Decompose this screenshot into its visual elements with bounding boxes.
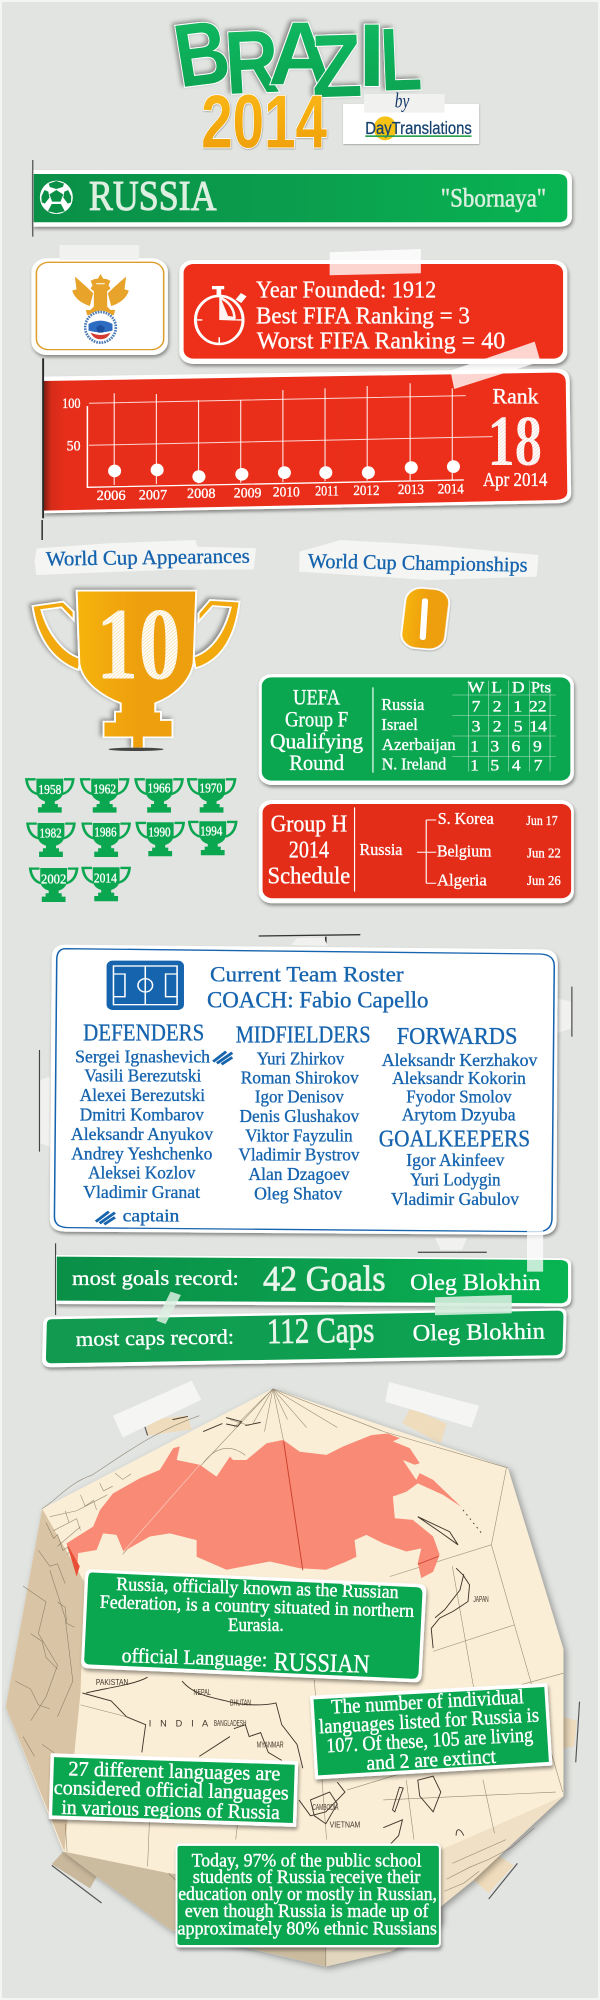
callout: official language: official Language: — [121, 1645, 268, 1671]
Asia coast lines — [82, 1416, 483, 1844]
text: worst ranking: Worst FIFA Ranking = 40 — [257, 327, 505, 354]
bar: most caps record: most caps record: — [76, 1325, 234, 1351]
callout: education in Russian: education only or mostly in Russian, — [178, 1884, 437, 1905]
legend: captain — [96, 1207, 180, 1226]
table: group standings: 7 — [472, 698, 480, 715]
text: date: Apr 2014 — [483, 468, 548, 491]
map labels: CAMBODIA — [312, 1803, 339, 1812]
meridian lines — [15, 1389, 563, 1966]
section: header and ranking — [31, 2, 572, 518]
line chart: rank history: 2008 — [187, 486, 216, 502]
callout: official languages — [50, 1754, 297, 1826]
list: defenders — [71, 1019, 213, 1203]
title: Brazil — [167, 2, 424, 117]
map labels: MYANMAR — [257, 1741, 284, 1750]
icon: orange zero — [400, 586, 451, 651]
list: goalkeepers: Yuri Lodygin — [410, 1171, 501, 1190]
callout: number of languages — [311, 1684, 551, 1778]
text: coach: COACH: Fabio Capello — [207, 988, 429, 1013]
text: Group H 2014 schedule — [268, 810, 350, 889]
text: best ranking: Best FIFA Ranking = 3 — [256, 302, 470, 329]
table: group standings: 4 — [512, 757, 521, 774]
trophy 2014 — [83, 867, 130, 901]
trophy 1962 — [81, 779, 128, 813]
small trophies: tournament years — [26, 779, 236, 902]
icon: captain mark — [213, 1052, 232, 1064]
trophy 2002 — [30, 868, 77, 902]
text: year founded: Year Founded: 1912 — [256, 276, 436, 303]
table: group standings: 6 — [512, 738, 520, 755]
list: goalkeepers: Vladimir Gabulov — [391, 1190, 519, 1210]
text: UEFA Group F qualifying round — [270, 686, 363, 776]
title: 2014: 2014 — [201, 81, 327, 164]
table: group standings: 3 — [490, 738, 499, 755]
line chart: rank history: 50 — [67, 439, 81, 454]
trophy 1966: 1966 — [148, 782, 171, 796]
bracket: fixtures: Jun 26 — [527, 874, 561, 889]
trophy 1986 — [83, 823, 130, 857]
callout: official languages: in various regions of Russia — [61, 1797, 280, 1824]
callout: official languages: considered official languages — [54, 1777, 289, 1805]
map labels: PAKISTAN — [96, 1678, 128, 1687]
table: group standings: 5 — [490, 757, 499, 774]
trophy 1990: 1990 — [148, 825, 171, 840]
callout: official language: Eurasia. — [228, 1615, 284, 1636]
callout: official language: Russia, officially known as the Russian — [116, 1574, 400, 1603]
bar: most goals record: most goals record: — [72, 1266, 239, 1290]
panel: Group H schedule — [259, 800, 574, 903]
line chart: rank history — [62, 383, 493, 504]
text: Group H 2014 schedule: 2014 — [289, 836, 329, 863]
bracket: fixtures: Jun 17 — [526, 814, 558, 829]
icon: football — [40, 181, 73, 214]
list: forwards: Arytom Dzyuba — [402, 1106, 516, 1125]
heading: World Cup appearances: World Cup Appearances — [46, 544, 250, 570]
heading: World Cup championships: World Cup Championships — [308, 549, 528, 576]
list: forwards: Aleksandr Kokorin — [392, 1069, 526, 1089]
line chart: rank history: 2010 — [273, 485, 300, 500]
bar: most caps record: 112 Caps — [267, 1310, 375, 1352]
trophy 2002: 2002 — [41, 872, 66, 887]
tape: top right — [385, 1382, 479, 1428]
list: midfielders: Vladimir Bystrov — [238, 1146, 360, 1165]
panel: UEFA qualifying — [259, 674, 574, 785]
list: forwards — [382, 1023, 538, 1125]
list: forwards: Aleksandr Kerzhakov — [382, 1051, 538, 1071]
callout: official languages: 27 different languages are — [68, 1758, 281, 1785]
table: group standings: 7 — [534, 757, 543, 774]
map labels: BHUTAN — [230, 1699, 251, 1708]
map labels — [96, 1595, 489, 1830]
table: group standings: Pts — [531, 679, 551, 696]
logo: Day Translations — [343, 89, 479, 144]
table: group standings: 1 — [470, 738, 479, 755]
section: team roster and records — [39, 935, 572, 1367]
map labels: NEPAL — [194, 1688, 211, 1697]
table: group standings: 1 — [470, 757, 479, 774]
line chart: rank history: 2012 — [353, 483, 380, 499]
icon: paper globe map — [6, 1389, 580, 1966]
list: defenders: DEFENDERS — [83, 1019, 204, 1046]
trophy 1982: 1982 — [39, 826, 62, 841]
trophy 1994: 1994 — [200, 824, 222, 839]
card: Russian crest — [31, 245, 168, 355]
trophy 1958: 1958 — [38, 783, 61, 798]
map region: Russia — [67, 1433, 461, 1578]
list: midfielders: Igor Denisov — [255, 1088, 344, 1107]
text: UEFA Group F qualifying round: Qualifying — [270, 730, 363, 754]
table: group standings: 2 — [493, 698, 502, 715]
callout: education in Russian: even though Russia is made up of — [185, 1901, 429, 1922]
table: group standings: Israel — [381, 715, 418, 734]
callout: education in Russian: Today, 97% of the public school — [192, 1850, 422, 1872]
table: group standings: 2 — [493, 717, 502, 735]
list: midfielders: Oleg Shatov — [254, 1184, 343, 1204]
bracket: fixtures — [360, 809, 561, 890]
text: current rank: Rank — [493, 384, 539, 409]
list: goalkeepers: GOALKEEPERS — [379, 1125, 530, 1152]
callout: number of languages: 107. Of these, 105 are living — [326, 1724, 534, 1758]
list: goalkeepers: Igor Akinfeev — [406, 1151, 505, 1171]
text: UEFA Group F qualifying round: Group F — [285, 708, 348, 732]
text: roster heading: Current Team Roster — [210, 962, 404, 987]
table: group standings: L — [491, 679, 502, 696]
list: midfielders: Roman Shirokov — [241, 1068, 359, 1088]
line chart: rank history: 2013 — [398, 482, 424, 498]
dark left facet — [6, 1509, 84, 1851]
trophy 1986: 1986 — [94, 825, 117, 840]
callout: official language — [81, 1569, 426, 1682]
text: UEFA Group F qualifying round: Round — [289, 751, 344, 776]
trophy 1970: 1970 — [199, 782, 222, 796]
icon: pitch — [107, 961, 184, 1010]
icon: eagle — [72, 274, 129, 315]
line chart: rank history: 2009 — [234, 485, 261, 501]
heading: Russia: RUSSIA — [89, 172, 217, 219]
list: midfielders: Denis Glushakov — [240, 1107, 359, 1127]
trophy 1962: 1962 — [93, 782, 116, 797]
list: defenders: Aleksandr Anyukov — [71, 1125, 213, 1145]
list: midfielders: Yuri Zhirkov — [257, 1049, 344, 1069]
bracket: fixtures: S. Korea — [438, 809, 494, 829]
bar: most goals record — [56, 1210, 571, 1307]
line chart: rank history: 2014 — [438, 481, 464, 497]
line chart: rank history: 2011 — [315, 484, 339, 499]
shaded lower facet — [63, 1851, 326, 1966]
bracket: fixtures: Belgium — [437, 842, 492, 861]
bar: most goals record: Oleg Blokhin — [410, 1270, 541, 1296]
list: midfielders — [236, 1021, 371, 1204]
table: group standings: 14 — [529, 717, 547, 735]
title: Brazil: B — [167, 2, 236, 107]
map labels: BANGLADESH — [214, 1719, 246, 1728]
map labels: I N D I A — [149, 1719, 209, 1729]
trophy 1958 — [26, 779, 73, 813]
section: World Cup record and group tables — [26, 520, 574, 903]
title: Brazil: L — [378, 10, 424, 110]
list: defenders: Vladimir Granat — [83, 1183, 201, 1203]
trophy 1966 — [136, 779, 182, 813]
number: 18: 18 — [488, 401, 542, 481]
bar: most goals record: 42 Goals — [263, 1259, 386, 1299]
table: group standings: 3 — [472, 717, 480, 735]
icon: large trophy with 10 — [33, 587, 240, 751]
trophy 1982 — [28, 823, 74, 857]
callout: number of languages: languages listed for Russia is — [318, 1704, 540, 1738]
banner: Russia — [32, 160, 572, 237]
list: defenders: Aleksei Kozlov — [88, 1164, 196, 1183]
line chart: rank history: 100 — [62, 396, 81, 412]
icon: large trophy with 10: 10 — [96, 587, 181, 702]
list: midfielders: Alan Dzagoev — [248, 1165, 350, 1185]
table: group standings: 9 — [533, 738, 542, 755]
list: defenders: Sergei Ignashevich — [75, 1047, 210, 1067]
table: group standings: 5 — [514, 717, 523, 735]
trophy 1994 — [189, 821, 236, 855]
icon: ball — [84, 311, 117, 344]
panel: roster — [50, 945, 558, 1235]
callout: education in Russian: approximately 80% ethnic Russians — [177, 1918, 437, 1940]
list: forwards: FORWARDS — [397, 1023, 517, 1050]
text: UEFA Group F qualifying round: UEFA — [293, 686, 340, 710]
bracket: fixtures: Jun 22 — [527, 846, 561, 861]
list: defenders: Vasili Berezutski — [84, 1067, 202, 1086]
line chart: rank history: 2007 — [139, 487, 167, 503]
table: group standings — [381, 679, 556, 774]
text: Group H 2014 schedule: Group H — [271, 810, 347, 837]
callout: number of languages: and 2 are extinct — [366, 1746, 497, 1775]
section: map and language facts — [6, 1381, 580, 1966]
logo: Day Translations: DayTranslations — [365, 118, 472, 138]
table: group standings: D — [512, 679, 525, 696]
bracket: fixtures: Algeria — [437, 871, 487, 890]
list: defenders: Alexei Berezutski — [80, 1086, 206, 1106]
list: forwards: Fyodor Smolov — [406, 1087, 512, 1107]
icon: stopwatch — [195, 286, 247, 344]
panel: founding and FIFA ranking — [179, 249, 567, 364]
callout: official language: Federation, is a country situated in northern — [100, 1592, 415, 1622]
callout: number of languages: The number of individual — [331, 1686, 525, 1719]
nickname: "Sbornaya" — [441, 184, 546, 213]
legend: captain: captain — [123, 1207, 180, 1226]
title: Brazil: Z — [309, 16, 364, 117]
callout: official language: RUSSIAN — [274, 1647, 370, 1679]
trophy 1990 — [137, 822, 184, 856]
text: Group H 2014 schedule: Schedule — [268, 862, 350, 889]
bar: most caps record — [42, 1308, 567, 1367]
list: midfielders: MIDFIELDERS — [236, 1021, 371, 1048]
trophy 2014: 2014 — [94, 871, 117, 886]
callout: education in Russian — [176, 1844, 441, 1947]
bracket: fixtures: Russia — [360, 840, 402, 859]
line chart: rank history: 2006 — [97, 488, 126, 504]
title: Brazil: I — [358, 6, 385, 105]
table: group standings: W — [468, 679, 485, 696]
table: group standings: 1 — [513, 698, 522, 715]
map labels: JAPAN — [473, 1595, 489, 1604]
list: defenders: Dmitri Kombarov — [80, 1106, 204, 1125]
tape: top left — [113, 1381, 201, 1437]
map labels: VIETNAM — [330, 1821, 360, 1830]
list: defenders: Andrey Yeshchenko — [71, 1144, 212, 1164]
list: midfielders: Viktor Fayzulin — [245, 1126, 353, 1146]
callout: education in Russian: students of Russia receive their — [193, 1867, 421, 1888]
title: Brazil: R — [222, 12, 282, 113]
trophy 1970 — [188, 779, 235, 813]
table: group standings: Azerbaijan — [382, 735, 456, 754]
table: group standings: Russia — [381, 695, 424, 714]
bar: most caps record: Oleg Blokhin — [412, 1319, 546, 1346]
heading: World Cup appearances — [34, 540, 256, 575]
heading: World Cup championships — [299, 540, 539, 580]
table: group standings: N. Ireland — [382, 755, 446, 773]
panel: FIFA rank chart — [42, 342, 571, 518]
list: goalkeepers — [379, 1125, 530, 1210]
logo: Day Translations: by — [395, 89, 409, 112]
title: Brazil: A — [268, 4, 333, 103]
table: group standings: 22 — [529, 698, 547, 715]
